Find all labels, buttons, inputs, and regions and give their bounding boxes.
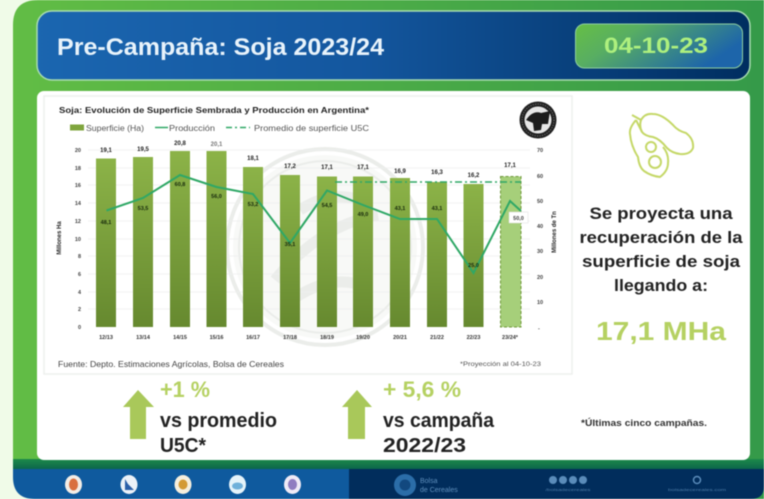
footer bar bbox=[13, 469, 764, 499]
left axis: 20 bbox=[75, 148, 81, 154]
campaign labels: 21/22 bbox=[430, 335, 444, 341]
campaign labels: 16/17 bbox=[246, 335, 260, 341]
surface labels: 18,1 bbox=[247, 156, 259, 162]
production labels: 43,1 bbox=[432, 206, 442, 212]
right axis bbox=[537, 148, 558, 332]
surface labels: 17,1 bbox=[504, 163, 516, 169]
footer icons bbox=[65, 475, 301, 494]
campaign labels: 13/14 bbox=[136, 335, 151, 341]
right axis: 70 bbox=[537, 148, 543, 154]
left axis bbox=[57, 148, 82, 331]
production labels: 53,2 bbox=[248, 202, 258, 208]
left axis: 18 bbox=[75, 166, 81, 172]
date badge bbox=[576, 24, 742, 68]
panel: chart bbox=[44, 96, 572, 374]
production labels bbox=[101, 182, 479, 269]
text: projection message: Se proyecta una bbox=[590, 205, 733, 223]
campaign labels: 12/13 bbox=[99, 335, 113, 341]
footer logo: Bolsa de Cereales: Bolsa bbox=[420, 478, 438, 485]
production labels: 56,0 bbox=[211, 194, 222, 200]
logo seal bbox=[520, 102, 556, 138]
campaign labels bbox=[99, 335, 519, 341]
left axis: 10 bbox=[75, 237, 81, 243]
footnote: *Últimas cinco campañas. bbox=[581, 417, 707, 429]
callout: vs promedio: +1 % bbox=[160, 377, 210, 402]
value: 17,1 MHa: 17,1 MHa bbox=[596, 316, 727, 346]
surface labels: 16,3 bbox=[431, 170, 443, 176]
surface labels bbox=[100, 141, 516, 179]
callout: vs campaña: 2022/23 bbox=[383, 435, 466, 457]
callout: vs campaña: vs campaña bbox=[383, 410, 495, 432]
footer social icons: /bolsadecereales bbox=[546, 487, 590, 492]
right axis: 20 bbox=[537, 275, 543, 281]
production line bbox=[106, 175, 521, 273]
text: projection message: superficie de soja bbox=[582, 253, 741, 271]
projected production label bbox=[509, 212, 528, 223]
left axis: 16 bbox=[75, 183, 81, 189]
projection note: *Proyección al 04-10-23 bbox=[460, 361, 541, 368]
icon: up arrow bbox=[123, 390, 154, 439]
campaign labels: 22/23 bbox=[467, 335, 480, 341]
watermark seal bbox=[227, 149, 423, 345]
right axis: 30 bbox=[537, 249, 543, 255]
production labels: 48,1 bbox=[101, 220, 111, 226]
icon: up arrow bbox=[342, 390, 372, 439]
callout: vs promedio: vs promedio bbox=[160, 410, 277, 432]
left axis: 2 bbox=[78, 307, 81, 313]
surface labels: 17,2 bbox=[284, 164, 296, 170]
callout: vs promedio: U5C* bbox=[160, 435, 206, 457]
campaign labels: 15/16 bbox=[210, 335, 223, 341]
footer social icons bbox=[546, 476, 590, 492]
surface labels: 20,1 bbox=[211, 142, 223, 148]
surface labels: 19,1 bbox=[100, 148, 112, 154]
projected bar bbox=[500, 176, 521, 327]
date badge: 04-10-23 bbox=[604, 33, 708, 58]
production labels: 49,0 bbox=[358, 212, 368, 218]
text: projection message: recuperación de la bbox=[580, 229, 743, 247]
production labels: 25,0 bbox=[468, 263, 479, 269]
grid lines bbox=[88, 150, 530, 309]
surface labels: 16,2 bbox=[468, 173, 480, 179]
text: projection message bbox=[580, 205, 743, 295]
campaign labels: 23/24* bbox=[502, 335, 519, 341]
header banner bbox=[37, 11, 750, 80]
footer logo: Bolsa de Cereales: de Cereales bbox=[420, 487, 458, 494]
white content panel bbox=[37, 91, 750, 460]
campaign labels: 14/15 bbox=[173, 335, 187, 341]
left axis: 14 bbox=[75, 201, 82, 207]
left axis: 12 bbox=[75, 219, 81, 225]
production labels: 54,5 bbox=[322, 203, 332, 209]
right axis: - bbox=[538, 326, 540, 332]
icon: soybean pod bbox=[630, 114, 693, 177]
campaign labels: 18/19 bbox=[320, 335, 334, 341]
legend: Superficie (Ha) bbox=[86, 124, 144, 133]
callout: vs campaña: + 5,6 % bbox=[383, 377, 461, 402]
chart title: Soja: Evolución de Superficie Sembrada y Producción en Argentina* bbox=[59, 105, 370, 115]
campaign labels: 19/20 bbox=[356, 335, 370, 341]
callout: vs promedio bbox=[123, 377, 277, 457]
production labels: 35,1 bbox=[285, 242, 295, 248]
surface labels: 20,8 bbox=[174, 141, 186, 147]
campaign labels: 20/21 bbox=[393, 335, 407, 341]
text: projection message: llegando a: bbox=[614, 277, 708, 295]
projected production label: 50,0 bbox=[513, 216, 524, 222]
right axis: 10 bbox=[537, 300, 543, 306]
left axis: 0 bbox=[78, 325, 81, 331]
left axis: 8 bbox=[78, 254, 81, 260]
source: Fuente: Depto. Estimaciones Agrícolas, Bolsa de Cereales bbox=[58, 359, 284, 369]
surface labels: 19,5 bbox=[137, 147, 149, 153]
right axis: Millones de Tn bbox=[552, 211, 558, 253]
legend: Promedio de superficie U5C bbox=[254, 124, 369, 133]
footer web link: bolsadecereales.com bbox=[668, 487, 727, 492]
average line bbox=[335, 181, 521, 183]
production labels: 43,1 bbox=[395, 206, 405, 212]
surface labels: 16,9 bbox=[394, 169, 406, 175]
surface labels: 17,1 bbox=[321, 165, 333, 171]
surface labels: 17,1 bbox=[357, 165, 369, 171]
bars bbox=[96, 151, 484, 327]
right axis: 40 bbox=[537, 224, 543, 230]
right axis: 60 bbox=[537, 174, 543, 180]
left axis: 6 bbox=[78, 272, 81, 278]
footer web link bbox=[668, 476, 727, 492]
callout: vs campaña bbox=[342, 377, 495, 457]
left axis: Millones Ha bbox=[57, 221, 63, 255]
production labels: 53,5 bbox=[138, 206, 148, 212]
title: Pre-Campaña: Soja 2023/24 bbox=[57, 34, 385, 61]
legend bbox=[70, 124, 369, 133]
right axis: 50 bbox=[537, 199, 543, 205]
production labels: 60,8 bbox=[175, 182, 185, 188]
campaign labels: 17/18 bbox=[283, 335, 297, 341]
left axis: 4 bbox=[78, 290, 82, 296]
footer logo: Bolsa de Cereales bbox=[394, 474, 458, 496]
legend: Producción bbox=[169, 124, 215, 133]
